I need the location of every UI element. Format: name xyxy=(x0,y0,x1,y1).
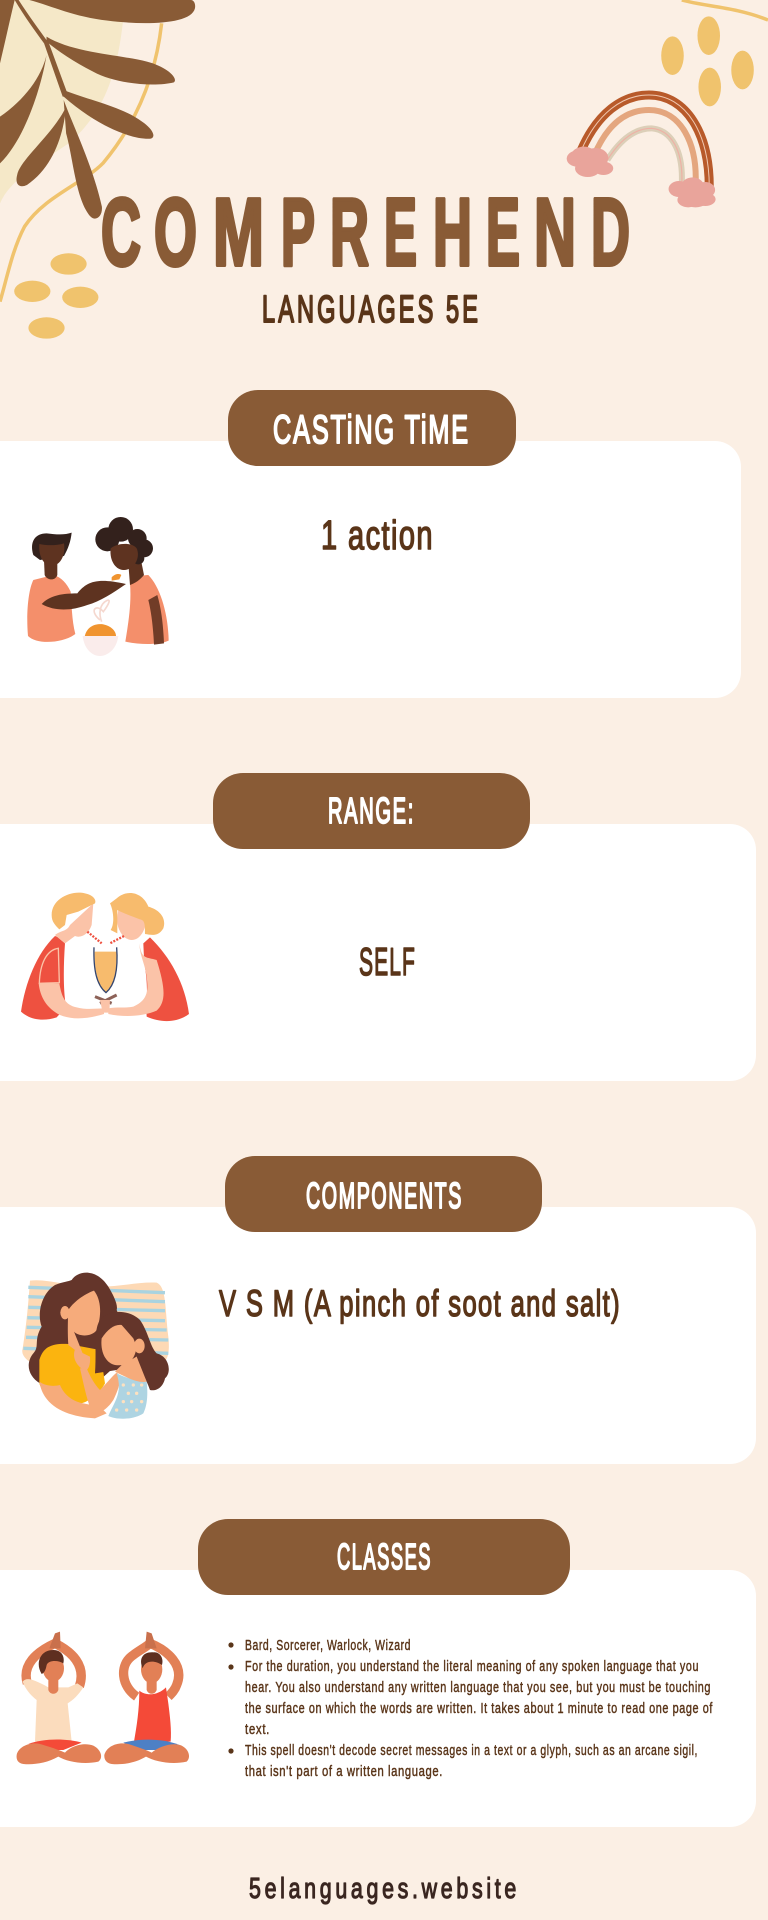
icon: mother and daughter xyxy=(22,1273,169,1419)
heading: classes xyxy=(198,1519,570,1595)
text: range value: SELF xyxy=(359,941,416,984)
panel: components xyxy=(0,1156,756,1464)
icon: couple sharing a drink xyxy=(21,893,189,1021)
text: description list: Bard, Sorcerer, Warlock, Wizard xyxy=(245,1637,411,1654)
text: description list: that isn't part of a written language. xyxy=(245,1763,443,1780)
title: O xyxy=(154,179,197,286)
heading: classes: CLASSES xyxy=(337,1536,432,1577)
title: N xyxy=(534,179,576,286)
text: casting time value: 1 action xyxy=(321,512,434,558)
panel: casting time xyxy=(0,390,741,698)
decoration: bottom-left dots xyxy=(14,253,98,339)
title: C xyxy=(101,179,141,286)
icon: rainbow with clouds xyxy=(567,95,716,207)
title: D xyxy=(591,179,630,286)
decoration: top-left leaves and curve xyxy=(0,0,195,302)
title: R xyxy=(330,179,369,286)
icon: two people meditating xyxy=(17,1632,189,1764)
footer: website: 5elanguages.website xyxy=(249,1873,520,1905)
heading: casting time xyxy=(228,390,516,466)
panel: classes xyxy=(0,1519,756,1827)
text: description list xyxy=(228,1637,713,1780)
heading: range xyxy=(213,773,530,849)
heading: components: COMPONENTS xyxy=(306,1175,463,1216)
heading: casting time: CASTiNG TiME xyxy=(273,408,470,452)
title: H xyxy=(433,179,472,286)
subtitle: LANGUAGES 5E xyxy=(262,289,481,331)
icon: two people sharing food xyxy=(27,517,169,656)
title xyxy=(101,179,630,286)
heading: components xyxy=(225,1156,542,1232)
title: P xyxy=(281,179,315,286)
title: E xyxy=(486,179,520,286)
heading: range: RANGE: xyxy=(328,790,415,831)
panel: range xyxy=(0,773,756,1081)
decoration: top-right dots and line xyxy=(661,0,768,106)
title: E xyxy=(384,179,417,286)
text: description list: text. xyxy=(245,1721,270,1738)
title: M xyxy=(213,179,264,286)
